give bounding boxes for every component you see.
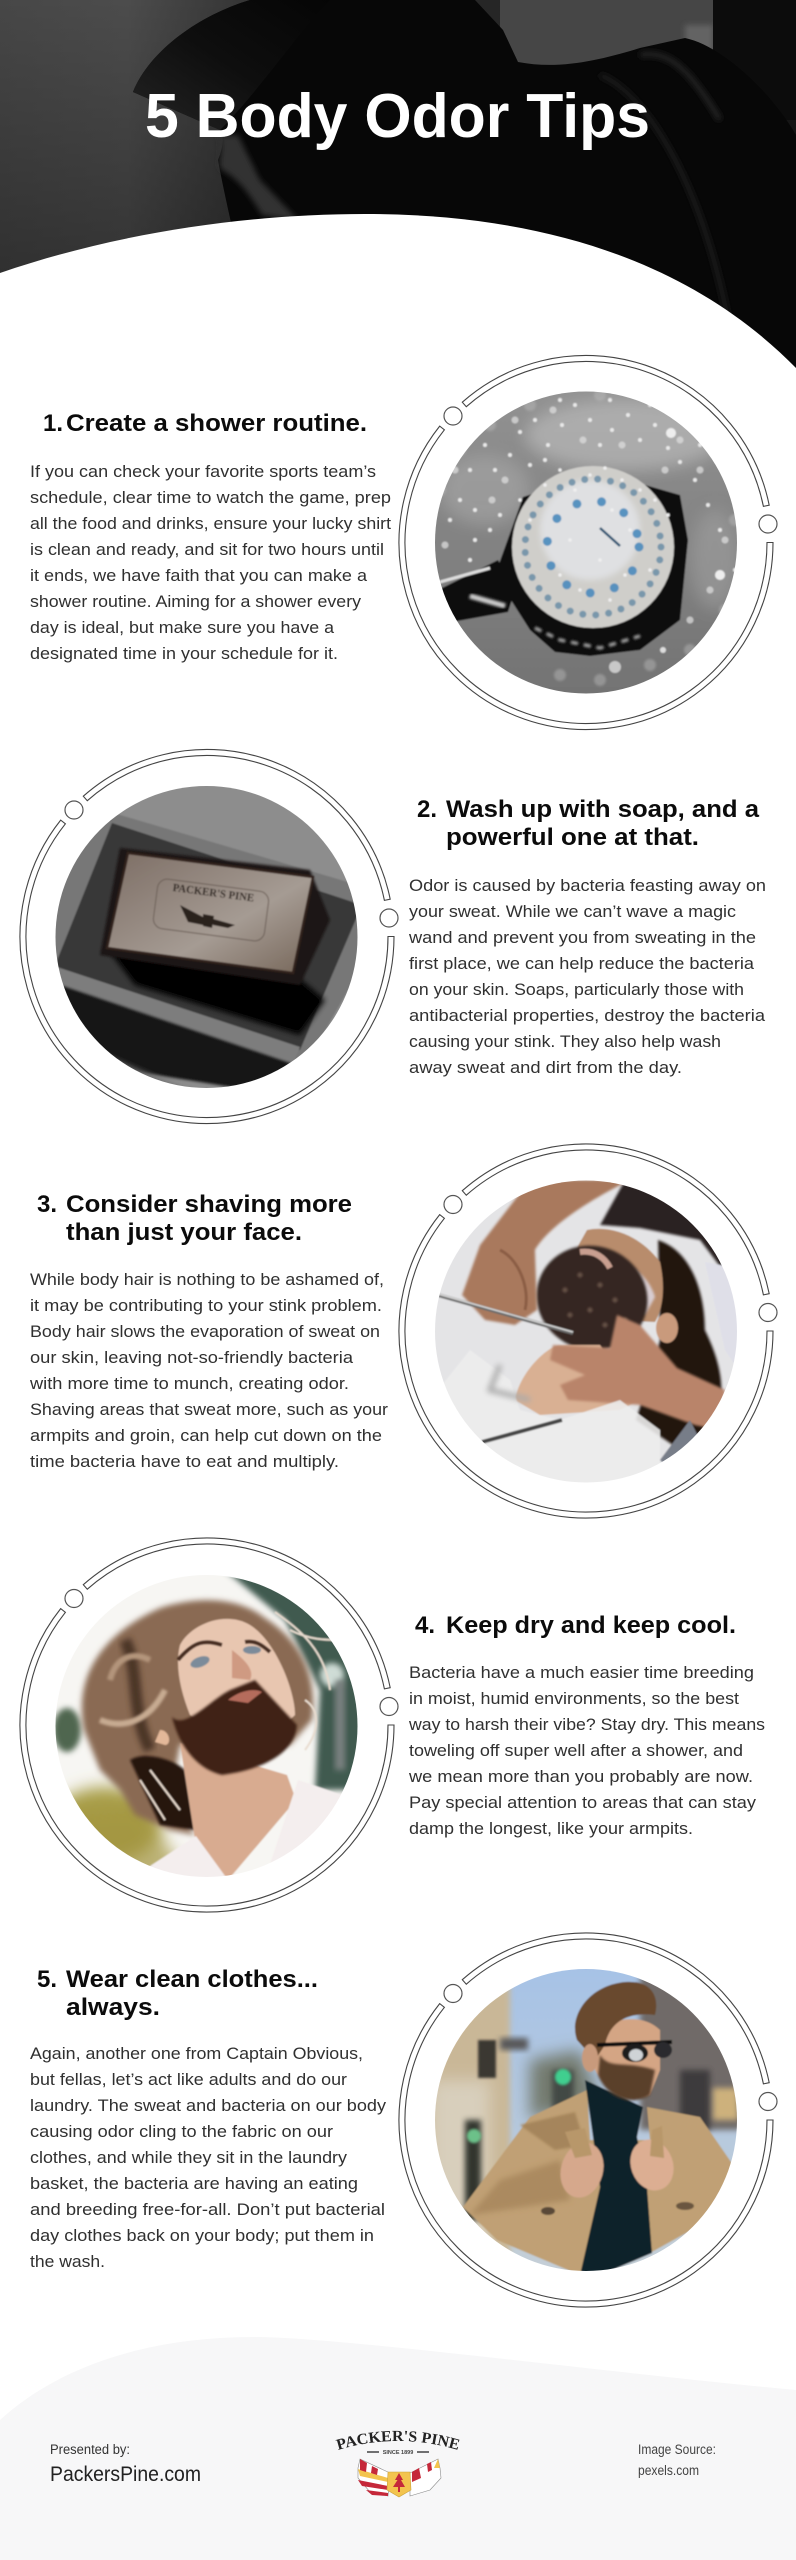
tip 4 heading: Keep dry and keep cool. bbox=[446, 1612, 736, 1639]
tip 1 ring bbox=[399, 355, 777, 730]
panel: tip 3 bbox=[29, 1144, 777, 1518]
tip 3 body: time bacteria have to eat and multiply. bbox=[30, 1453, 339, 1471]
tip 3 body: armpits and groin, can help cut down on the bbox=[30, 1427, 382, 1445]
tip 2 heading: powerful one at that. bbox=[446, 824, 699, 851]
tip 2 heading bbox=[417, 796, 760, 851]
tip 2 heading: 2. bbox=[417, 796, 437, 823]
tip 5 body bbox=[30, 2045, 387, 2271]
tip 5 body: clothes, and while they sit in the laundry bbox=[30, 2149, 348, 2167]
tip 2 heading: Wash up with soap, and a bbox=[446, 796, 760, 823]
image source: Image Source: bbox=[638, 2442, 716, 2457]
logo: Packer's Pine bbox=[336, 2430, 460, 2498]
tip 3 heading: Consider shaving more bbox=[66, 1191, 352, 1218]
tip 4 body: Pay special attention to areas that can stay bbox=[409, 1794, 757, 1812]
tip 5 heading: 5. bbox=[37, 1966, 57, 1993]
tip 5 photo: man in tan coat bbox=[430, 1965, 745, 2280]
tip 1 body bbox=[30, 463, 391, 663]
tip 2 body: causing your stink. They also help wash bbox=[409, 1033, 721, 1051]
tip 1 body: designated time in your schedule for it. bbox=[30, 645, 338, 663]
tip 5 heading: Wear clean clothes... bbox=[66, 1966, 318, 1993]
tip 5 body: basket, the bacteria are having an eating bbox=[30, 2175, 358, 2193]
tip 4 body bbox=[408, 1664, 765, 1838]
tip 5 heading bbox=[37, 1966, 318, 2021]
tip 4 body: in moist, humid environments, so the best bbox=[409, 1690, 739, 1708]
logo: Packer's Pine: PACKER'S PINE bbox=[336, 2430, 460, 2450]
tip 1 body: If you can check your favorite sports team’s bbox=[30, 463, 376, 481]
tip 2 body: on your skin. Soaps, particularly those with bbox=[409, 981, 744, 999]
tip 3 body: Body hair slows the evaporation of sweat on bbox=[30, 1323, 380, 1341]
image source bbox=[638, 2442, 716, 2478]
tip 1 photo: shower head bbox=[430, 385, 742, 700]
tip 5 body: day clothes back on your body; put them in bbox=[30, 2227, 374, 2245]
tip 1 body: all the food and drinks, ensure your lucky shirt bbox=[30, 515, 391, 533]
tip 3 body: with more time to munch, creating odor. bbox=[29, 1375, 349, 1393]
tip 3 heading bbox=[37, 1191, 352, 1246]
tip 2 photo: soap bar: PACKER'S PINE bbox=[172, 882, 255, 905]
tip 4 body: toweling off super well after a shower, and bbox=[409, 1742, 743, 1760]
tip 2 body: wand and prevent you from sweating in the bbox=[408, 929, 756, 947]
tip 3 body: it may be contributing to your stink problem. bbox=[30, 1297, 382, 1315]
tip 1 heading: 1. bbox=[43, 410, 63, 437]
tip 3 body: our skin, leaving not-so-friendly bacteria bbox=[30, 1349, 354, 1367]
panel: footer bbox=[50, 2430, 716, 2498]
tip 3 body: While body hair is nothing to be ashamed of, bbox=[30, 1271, 384, 1289]
presented by bbox=[50, 2442, 201, 2486]
tip 1 body: is clean and ready, and sit for two hours until bbox=[30, 541, 384, 559]
tip 1 body: it ends, we have faith that you can make a bbox=[30, 567, 368, 585]
tip 2 photo: soap bar bbox=[56, 786, 358, 1088]
tip 2 body: away sweat and dirt from the day. bbox=[409, 1059, 682, 1077]
tip 5 body: and breeding free-for-all. Don’t put bacterial bbox=[30, 2201, 385, 2219]
tip 3 heading: 3. bbox=[37, 1191, 57, 1218]
tip 5 body: Again, another one from Captain Obvious, bbox=[30, 2045, 363, 2063]
tip 2 body: your sweat. While we can’t wave a magic bbox=[409, 903, 736, 921]
tip 4 photo: man with long hair bbox=[56, 1575, 358, 1877]
tip 4 body: we mean more than you probably are now. bbox=[408, 1768, 753, 1786]
tip 5 body: the wash. bbox=[30, 2253, 105, 2271]
presented by: Presented by: bbox=[50, 2442, 130, 2457]
tip 5 body: causing odor cling to the fabric on our bbox=[30, 2123, 334, 2141]
tip 4 heading: 4. bbox=[415, 1612, 435, 1639]
tip 2 ring bbox=[20, 749, 398, 1124]
tip 4 body: way to harsh their vibe? Stay dry. This means bbox=[408, 1716, 765, 1734]
tip 3 ring bbox=[399, 1144, 777, 1518]
tip 1 heading: Create a shower routine. bbox=[66, 410, 367, 437]
tip 1 body: day is ideal, but make sure you have a bbox=[30, 619, 335, 637]
title: 5 Body Odor Tips bbox=[145, 82, 650, 151]
panel: tip 5 bbox=[30, 1933, 777, 2307]
image source: pexels.com bbox=[638, 2463, 699, 2478]
tip 4 body: Bacteria have a much easier time breeding bbox=[409, 1664, 754, 1682]
tip 1 body: shower routine. Aiming for a shower every bbox=[30, 593, 362, 611]
tip 3 photo: beard shave bbox=[435, 1180, 737, 1482]
tip 5 heading: always. bbox=[66, 1994, 160, 2021]
panel: tip 2 bbox=[20, 749, 766, 1124]
panel: tip 4 bbox=[20, 1538, 765, 1912]
tip 5 body: laundry. The sweat and bacteria on our body bbox=[30, 2097, 387, 2115]
tip 2 body: antibacterial properties, destroy the bacteria bbox=[409, 1007, 766, 1025]
tip 1 body: schedule, clear time to watch the game, prep bbox=[30, 489, 391, 507]
tip 4 body: damp the longest, like your armpits. bbox=[409, 1820, 693, 1838]
hero photo: man in flat cap bbox=[0, 0, 796, 400]
presented by: PackersPine.com bbox=[50, 2463, 201, 2486]
panel: tip 1 bbox=[30, 355, 777, 730]
logo: Packer's Pine: SINCE 1899 bbox=[383, 2450, 413, 2456]
footer background bbox=[0, 2337, 796, 2560]
tip 2 body: Odor is caused by bacteria feasting away on bbox=[409, 877, 766, 895]
tip 5 ring bbox=[399, 1933, 777, 2307]
tip 2 body bbox=[408, 877, 766, 1077]
tip 3 heading: than just your face. bbox=[66, 1219, 302, 1246]
tip 3 body bbox=[29, 1271, 389, 1471]
tip 2 body: first place, we can help reduce the bacteria bbox=[409, 955, 755, 973]
tip 3 body: Shaving areas that sweat more, such as your bbox=[30, 1401, 389, 1419]
tip 4 ring bbox=[20, 1538, 398, 1912]
tip 5 body: but fellas, let’s act like adults and do our bbox=[30, 2071, 348, 2089]
